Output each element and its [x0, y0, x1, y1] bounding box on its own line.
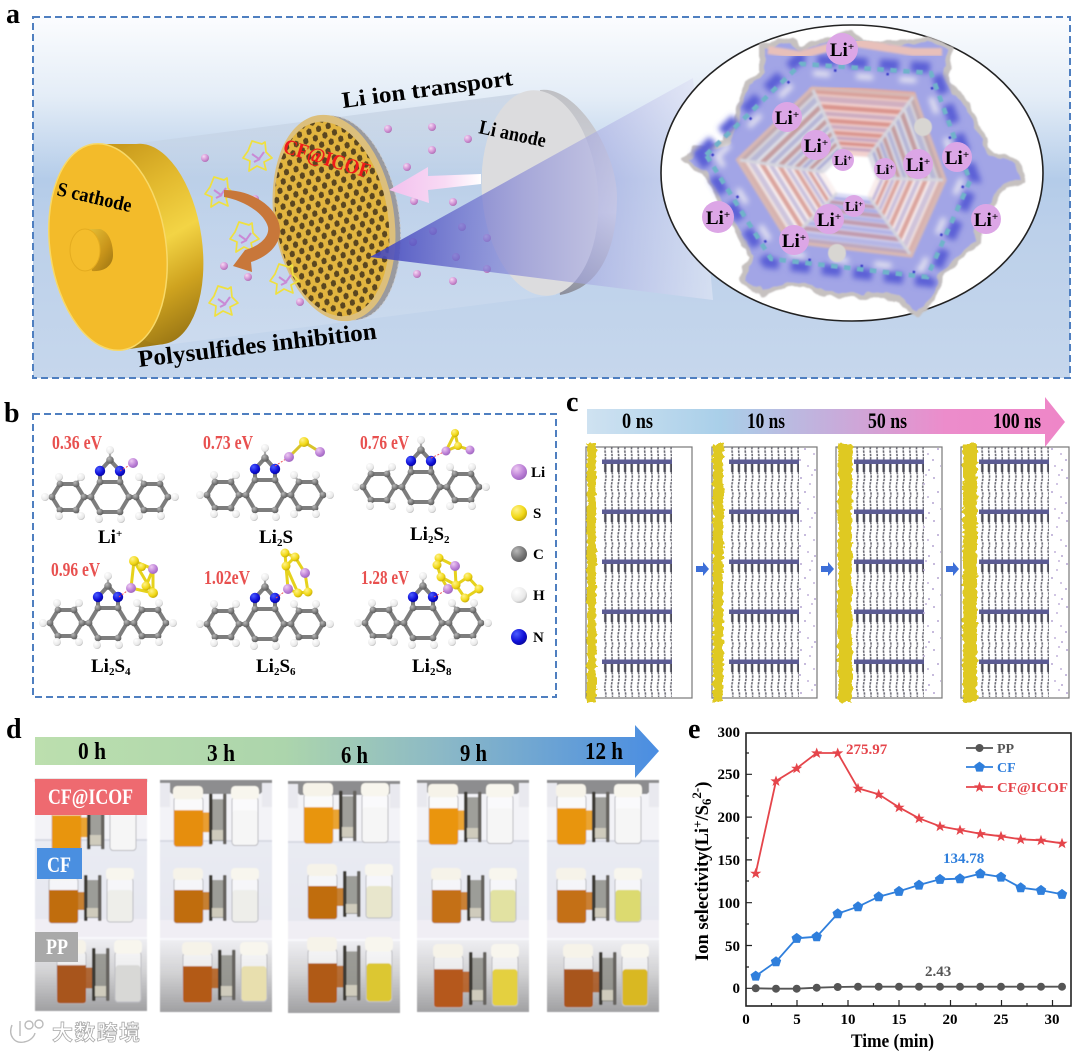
panel label c: c [566, 387, 578, 418]
y tick labels: 200 [718, 810, 740, 826]
panel label d: d [6, 714, 22, 745]
panel d: H-cell permeation photos [35, 725, 659, 1013]
y axis title: 6 [699, 798, 714, 805]
x tick labels: 15 [892, 1012, 906, 1028]
label: Li ion transport: Li ion transport [340, 65, 514, 113]
Li+ badges: + [800, 232, 806, 244]
molecule Li2S [196, 432, 334, 549]
CF@ICOF honeycomb separator [258, 106, 414, 330]
molecule Li2S8: 2 [430, 666, 436, 678]
molecule Li2S8: 8 [446, 666, 452, 678]
framework beads [828, 118, 932, 262]
molecule Li+: Li [98, 527, 116, 548]
arrow: Li ion direction [389, 167, 481, 203]
y axis title: /S [693, 805, 713, 822]
Li+ badges: + [848, 41, 854, 53]
Li+ badges: Li [876, 163, 889, 178]
Li+ badges: Li [906, 155, 924, 176]
S cathode disc [36, 136, 216, 358]
x tick labels: 10 [840, 1012, 856, 1028]
top rim tint [768, 42, 942, 55]
label: Polysulfides inhibition: Polysulfides inhibition [137, 319, 378, 373]
molecule Li2S6: Li [256, 656, 274, 677]
Li+ badges: + [793, 109, 799, 121]
photo 6 h [288, 781, 400, 1013]
watermark icon [11, 1020, 43, 1042]
molecule Li2S2: S [433, 524, 444, 545]
y axis title: Ion selectivity(Li [693, 828, 713, 961]
x tick labels: 0 [742, 1012, 750, 1028]
atom legend: C [533, 547, 544, 563]
molecule Li2S4: 0.96 eV [51, 559, 100, 581]
frame 10 ns [712, 444, 817, 702]
transport tube [140, 90, 556, 347]
watermark: 大数跨境 [52, 1022, 140, 1045]
time labels: 100 ns [993, 408, 1041, 433]
label: Li anode: Li anode [477, 116, 548, 152]
time labels [78, 739, 623, 769]
molecule Li2S2 [352, 429, 490, 546]
molecule Li+ [41, 432, 179, 548]
polysulfide molecules [205, 141, 299, 316]
time labels: 0 h [78, 739, 106, 765]
molecule Li2S6: 1.02eV [204, 567, 250, 589]
Li+ badges: Li [834, 154, 847, 169]
molecule Li+: 0.36 eV [52, 432, 102, 454]
photo 9 h [417, 780, 529, 1012]
molecule Li2S4: 2 [109, 666, 115, 678]
series CF [756, 874, 1062, 976]
time labels: 6 h [341, 743, 368, 769]
chart legend [966, 742, 1068, 796]
chart legend: CF [997, 761, 1016, 776]
frame arrows [696, 562, 959, 576]
panel c: molecular dynamics timeline [586, 397, 1069, 702]
frame 50 ns [836, 444, 942, 702]
molecule Li2S2: Li [410, 524, 428, 545]
molecule Li2S6: 6 [290, 666, 296, 678]
cathode terminal [70, 229, 113, 271]
label: CF@ICOF: CF@ICOF [281, 134, 374, 183]
tag CF@ICOF: CF@ICOF [48, 784, 133, 809]
peak annotation 134.78: 134.78 [943, 851, 984, 867]
y tick labels: 50 [725, 939, 740, 955]
molecule Li2S6 [196, 548, 334, 678]
time labels: 0 ns [622, 408, 653, 433]
blue surface blotches [699, 59, 975, 282]
panel label b: b [4, 398, 20, 429]
time labels [622, 408, 1041, 433]
time arrow [587, 397, 1065, 447]
molecule Li2S: Li [259, 527, 277, 548]
frame 0 ns [586, 444, 692, 702]
Li+ badges: Li [974, 210, 992, 231]
Li+ badges: Li [830, 40, 848, 61]
tag PP [35, 932, 78, 962]
Li+ badges: + [847, 154, 852, 163]
atom legend [511, 464, 545, 646]
molecule Li2S4: 4 [125, 666, 131, 678]
Li+ badges: + [858, 200, 863, 209]
y tick labels [718, 725, 740, 997]
molecule Li2S4 [39, 556, 177, 678]
chart legend: PP [997, 742, 1015, 757]
photo 0 h [35, 779, 147, 1011]
tag PP: PP [46, 934, 68, 959]
molecule Li2S4: S [114, 656, 125, 677]
time arrow [35, 725, 659, 778]
y axis title: 2- [689, 788, 704, 799]
molecule Li2S8 [354, 554, 492, 678]
Li+ badges: + [963, 149, 969, 161]
atom legend: S [533, 506, 541, 522]
Li+ badges: Li [845, 200, 858, 215]
Li+ badges: Li [706, 208, 724, 229]
molecule Li2S: S [282, 527, 293, 548]
watermark [11, 1020, 140, 1045]
frame 100 ns [961, 444, 1069, 702]
x tick labels [742, 1012, 1060, 1028]
time labels: 9 h [460, 741, 487, 767]
y tick labels: 0 [732, 981, 740, 997]
series PP [756, 987, 1062, 989]
x tick labels: 30 [1044, 1012, 1060, 1028]
panel label e: e [688, 714, 700, 745]
Li+ badges: + [724, 209, 730, 221]
zoomed pore lens [661, 25, 1043, 321]
molecule Li2S2: 2 [428, 534, 434, 546]
panel a: battery schematic [33, 17, 1070, 378]
atom legend: Li [531, 465, 545, 481]
label: S cathode: S cathode [55, 178, 134, 217]
axis ticks [746, 753, 1052, 1006]
molecule Li2S4: Li [91, 656, 109, 677]
wedge tints [740, 90, 943, 254]
y tick labels: 150 [718, 853, 740, 869]
x tick labels: 5 [793, 1012, 801, 1028]
molecule Li2S2: 0.76 eV [360, 432, 409, 454]
time labels: 3 h [207, 741, 235, 767]
series CF@ICOF [756, 753, 1062, 873]
Li+ badges: Li [775, 108, 793, 129]
molecule Li2S6: S [279, 656, 290, 677]
Li+ badges: Li [817, 210, 835, 231]
Li+ badges: + [822, 137, 828, 149]
molecule Li2S6: 2 [274, 666, 280, 678]
Li+ badges [702, 33, 1001, 255]
pore outer surface [685, 32, 1022, 315]
axes frame [746, 733, 1071, 1006]
photo 3 h [160, 780, 272, 1012]
Li+ badges: + [992, 211, 998, 223]
Li+ badges: + [889, 163, 894, 172]
y tick labels: 100 [718, 896, 740, 912]
time labels: 10 ns [747, 408, 785, 433]
pore framework strands [706, 64, 970, 277]
molecule Li2S2: 2 [444, 534, 450, 546]
atom legend: H [533, 588, 545, 604]
molecule Li2S8: 1.28 eV [361, 567, 409, 589]
Li+ badges: Li [945, 148, 963, 169]
molecule Li2S: 2 [277, 537, 283, 549]
y tick labels: 300 [718, 725, 740, 741]
Li+ badges: + [835, 211, 841, 223]
tag CF@ICOF [35, 779, 147, 815]
time labels: 12 h [585, 739, 623, 765]
tag CF: CF [47, 852, 71, 877]
panel b frame [33, 414, 556, 697]
time labels: 50 ns [868, 408, 907, 433]
atom legend: N [533, 630, 544, 646]
molecule Li2S: 0.73 eV [203, 432, 253, 454]
panel b: adsorption structures [33, 414, 556, 697]
pore hole [825, 155, 876, 196]
Li+ badges: Li [804, 136, 822, 157]
Li ions [201, 123, 491, 306]
concentric pore channel [740, 90, 943, 254]
molecule Li+: + [116, 528, 122, 540]
photo 12 h [547, 780, 659, 1012]
y axis title: + [690, 820, 705, 828]
molecule Li2S8: Li [412, 656, 430, 677]
top band inner tint [810, 88, 915, 96]
molecule Li2S8: S [435, 656, 446, 677]
tag CF [37, 848, 82, 879]
chart legend: CF@ICOF [997, 781, 1068, 796]
peak annotation 275.97: 275.97 [846, 742, 888, 758]
Li+ badges: + [924, 156, 930, 168]
y axis title: ) [693, 782, 713, 788]
annotation 2.43: 2.43 [925, 964, 951, 980]
y tick labels: 250 [718, 767, 740, 783]
Li+ badges: Li [782, 231, 800, 252]
Li anode disc [473, 85, 617, 301]
panel a background frame [33, 17, 1070, 378]
x tick labels: 25 [994, 1012, 1008, 1028]
panel e: ion selectivity chart [689, 725, 1071, 1051]
arrow: polysulfide rejection [224, 190, 280, 272]
x tick labels: 20 [942, 1012, 958, 1028]
projection cone to zoomed pore [370, 78, 713, 300]
